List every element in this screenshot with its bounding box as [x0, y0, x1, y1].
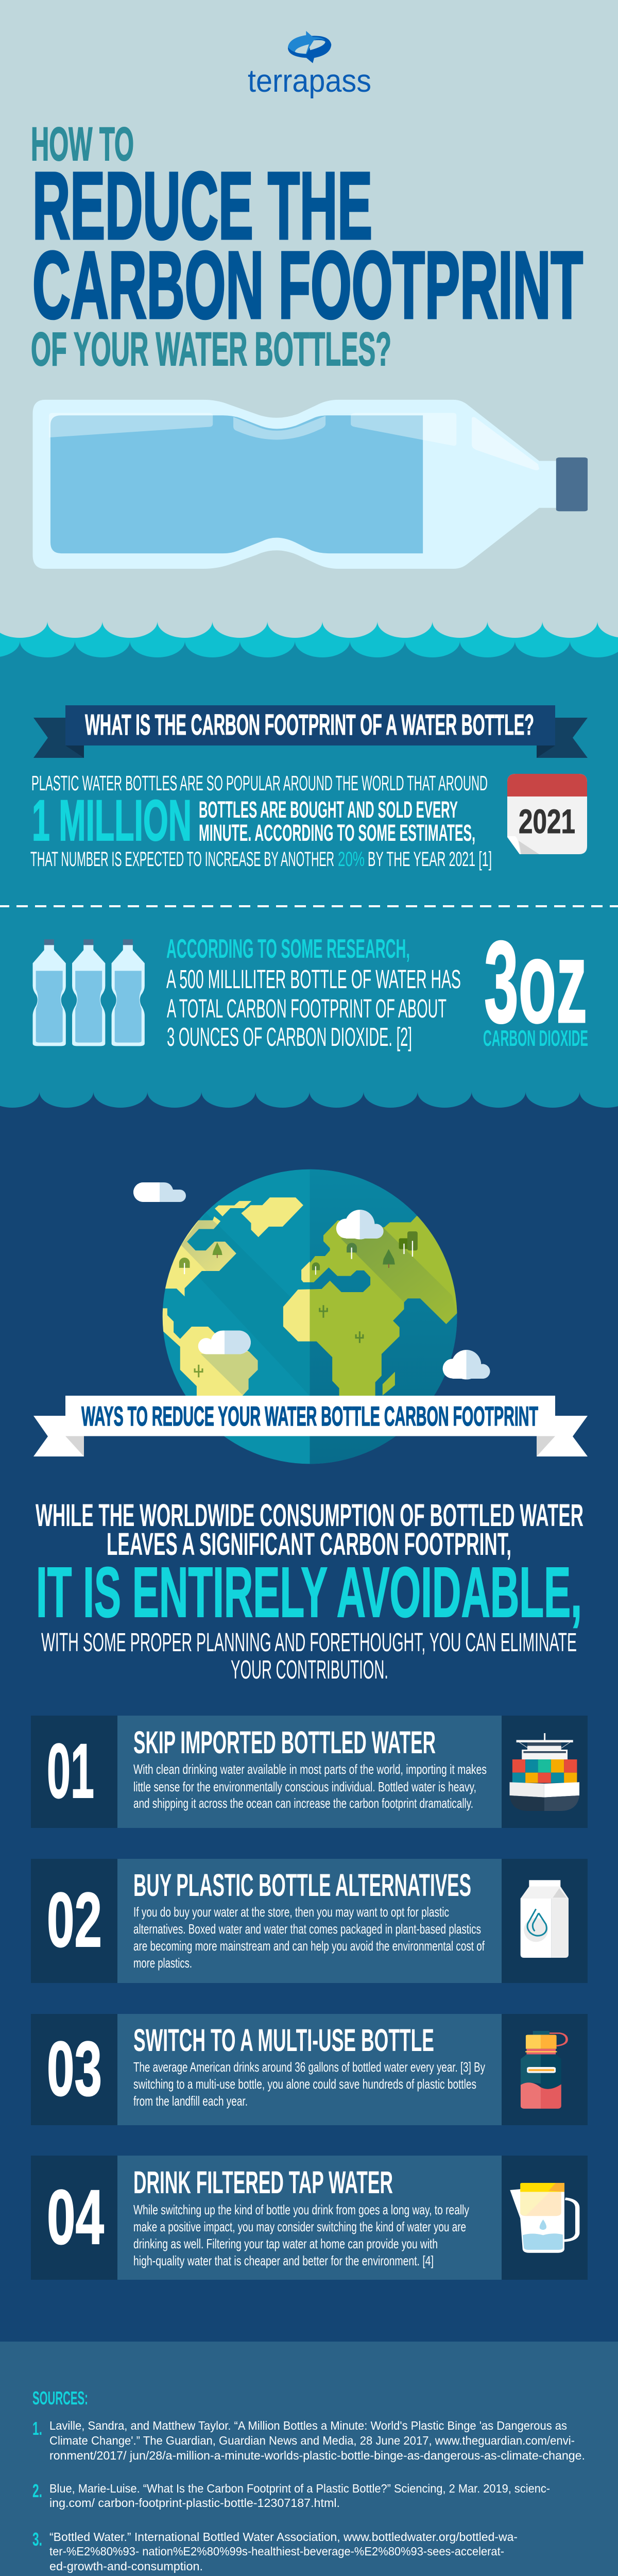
- body text: The average American drinks around 36 gallons of bottled water every year. [3] By: [133, 2059, 485, 2075]
- text block: 1 million bottles: [30, 771, 492, 871]
- trees and cacti: [179, 1231, 418, 1377]
- number 04: 04: [47, 2174, 104, 2260]
- source 2: Blue, Marie-Luise. “What Is the Carbon Footprint of a Plastic Bottle?” Sciencing, 2 Mar. 2019, scienc-: [49, 2482, 550, 2495]
- land: africa and eurasia: [283, 1216, 462, 1396]
- text block: 1 million bottles: THAT NUMBER IS EXPECTED TO INCREASE BY ANOTHER: [30, 848, 334, 871]
- icon: boxed water carton: [521, 1880, 569, 1958]
- source 2: ing.com/ carbon-footprint-plastic-bottle-12307187.html.: [49, 2496, 340, 2510]
- panel: tip 03: [31, 2014, 588, 2125]
- icon: water filter pitcher: [510, 2183, 577, 2253]
- text block: 500 milliliter bottle: ACCORDING TO SOME RESEARCH,: [166, 934, 410, 964]
- source 3: “Bottled Water.” International Bottled Water Association, www.bottledwater.org/bottled-wa-: [49, 2530, 518, 2544]
- source 1: 1.: [32, 2418, 42, 2439]
- text block: 1 million bottles: 20%: [338, 848, 365, 871]
- icon: calendar 2021: 2021: [519, 802, 575, 840]
- water waves: [0, 621, 618, 1094]
- heading: filtered tap water: DRINK FILTERED TAP WATER: [133, 2165, 393, 2200]
- panel: tip 04: [31, 2156, 588, 2280]
- heading ribbon: ways to reduce: [33, 1396, 588, 1456]
- text block: 500 milliliter bottle: [166, 934, 461, 1052]
- background: sky: [0, 0, 618, 642]
- body text: and shipping it across the ocean can increase the carbon footprint dramatically.: [133, 1795, 473, 1811]
- icon: three water bottles: [33, 939, 145, 1046]
- heading: sources: SOURCES:: [32, 2387, 88, 2409]
- title: HOW TO: [31, 118, 134, 171]
- dashed divider: [0, 905, 618, 907]
- body text: [133, 2202, 469, 2268]
- source 3: [32, 2529, 518, 2573]
- bottle 3: [112, 939, 145, 1046]
- body text: drinking as well. Filtering your tap water at home can provide you with: [133, 2236, 438, 2251]
- panel: navy lower section: [0, 1092, 618, 2342]
- text block: it is entirely avoidable: YOUR CONTRIBUTION.: [231, 1655, 388, 1684]
- number 02: 02: [47, 1876, 102, 1963]
- heading ribbon: what is the carbon footprint: [33, 705, 588, 758]
- source 1: [32, 2418, 585, 2462]
- panel: tip 01: [31, 1716, 588, 1828]
- body text: from the landfill each year.: [133, 2093, 248, 2109]
- body text: With clean drinking water available in most parts of the world, importing it makes: [133, 1761, 487, 1777]
- body text: [133, 1761, 487, 1811]
- icon: calendar 2021: [507, 774, 587, 854]
- body text: [133, 2059, 485, 2109]
- text block: 1 million bottles: BY THE YEAR 2021 [1]: [368, 848, 492, 871]
- body text: [133, 1904, 485, 1971]
- panel: sources: [0, 2342, 618, 2576]
- source 1: ronment/2017/ jun/28/a-million-a-minute-worlds-plastic-bottle-binge-as-dangerous-as-climate-change.: [49, 2449, 585, 2462]
- icon: cloud over eurasia: [336, 1210, 384, 1240]
- source 3: 3.: [32, 2529, 42, 2550]
- body text: are becoming more mainstream and can help you avoid the environmental cost of: [133, 1938, 485, 1954]
- source 2: [32, 2480, 550, 2510]
- bottle 2: [72, 939, 105, 1046]
- number 01: 01: [47, 1727, 94, 1814]
- text block: it is entirely avoidable: [36, 1498, 583, 1684]
- logo wordmark: terrapass: [248, 63, 371, 99]
- panel: tip 02: [31, 1859, 588, 1983]
- bottle 1: [33, 939, 66, 1046]
- illustration: globe: [154, 1170, 462, 1464]
- text block: 500 milliliter bottle: 3 OUNCES OF CARBON DIOXIDE. [2]: [167, 1022, 412, 1052]
- icon: multi-use bottle: [521, 2031, 567, 2109]
- icon: large plastic water bottle: [33, 400, 588, 569]
- icon: terrapass arrows: [288, 31, 331, 63]
- icon: cloud lower right: [443, 1350, 490, 1380]
- source 1: Laville, Sandra, and Matthew Taylor. “A Million Bottles a Minute: World's Plastic Binge 'as Dangerous as: [49, 2419, 567, 2432]
- text block: 1 million bottles: 1 MILLION: [32, 788, 192, 853]
- body text: alternatives. Boxed water and water that comes packaged in plant-based plastics: [133, 1921, 481, 1937]
- icon: cloud over south america: [198, 1331, 251, 1354]
- body text: little sense for the environmentally conscious individual. Bottled water is heavy,: [133, 1779, 476, 1794]
- body text: more plastics.: [133, 1955, 192, 1971]
- source 3: ter-%E2%80%93- nation%E2%80%99s-healthiest-beverage-%E2%80%93-sees-accelerat-: [49, 2545, 504, 2558]
- logo: terrapass top: [248, 31, 371, 99]
- body text: make a positive impact, you may consider switching the kind of water you are: [133, 2219, 466, 2234]
- source 2: 2.: [32, 2480, 42, 2501]
- number 03: 03: [47, 2025, 102, 2112]
- icon: cloud upper left: [133, 1182, 186, 1202]
- icon: container ship: [510, 1733, 579, 1811]
- body text: high-quality water that is cheaper and better for the environment. [4]: [133, 2253, 434, 2268]
- body text: If you do buy your water at the store, then you may want to opt for plastic: [133, 1904, 449, 1920]
- title: [31, 118, 583, 376]
- body text: switching to a multi-use bottle, you alone could save hundreds of plastic bottles: [133, 2076, 476, 2092]
- source 3: ed-growth-and-consumption.: [49, 2560, 203, 2573]
- source 1: Climate Change'.” The Guardian, Guardian News and Media, 28 June 2017, www.theguardian.com/envi-: [49, 2434, 575, 2447]
- body text: While switching up the kind of bottle you drink from goes a long way, to really: [133, 2202, 469, 2217]
